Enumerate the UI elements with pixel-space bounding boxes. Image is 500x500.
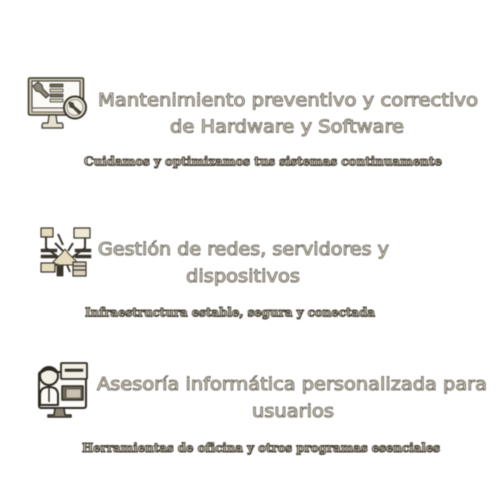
icon: advisor and monitor: [39, 363, 87, 417]
subtitle: asesoria: Herramientas de oficina y otros programas esenciales: [82, 441, 440, 455]
subtitle: mantenimiento: Cuidamos y optimizamos tus sistemas continuamente: [84, 154, 442, 168]
service block: asesoria: [39, 363, 487, 455]
heading: mantenimiento: de Hardware y Software: [170, 116, 404, 138]
service block: redes: [41, 228, 389, 320]
heading: asesoria: [97, 374, 487, 422]
service block: mantenimiento: [28, 78, 478, 168]
heading: mantenimiento: [98, 90, 478, 138]
icon: monitor with wrench: [28, 78, 86, 128]
heading: redes: Gestión de redes, servidores y: [98, 239, 389, 260]
heading: asesoria: usuarios: [252, 401, 334, 422]
icon: network hub: [41, 228, 91, 276]
heading: asesoria: Asesoría informática personalizada para: [97, 374, 487, 395]
heading: redes: dispositivos: [186, 266, 300, 287]
heading: mantenimiento: Mantenimiento preventivo y correctivo: [98, 90, 478, 111]
subtitle: redes: Infraestructura estable, segura y conectada: [85, 306, 375, 320]
heading: redes: [98, 239, 389, 287]
